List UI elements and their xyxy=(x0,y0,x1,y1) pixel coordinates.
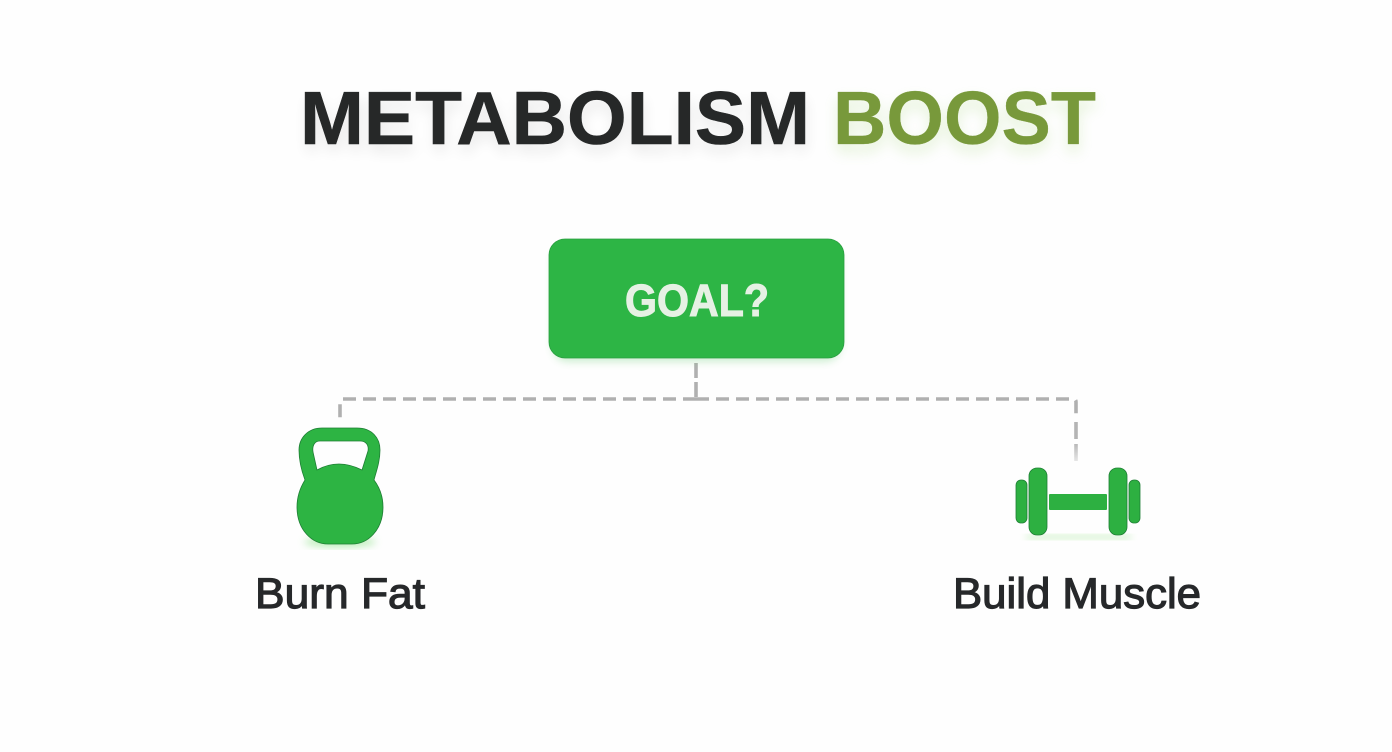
title: BOOST xyxy=(833,84,1096,168)
title: METABOLISM xyxy=(300,76,810,160)
title xyxy=(300,76,1096,168)
title: METABOLISM xyxy=(302,84,811,168)
connector lines xyxy=(340,363,1076,462)
label: burn fat: Burn Fat xyxy=(255,570,425,618)
goal label: GOAL? xyxy=(625,275,769,326)
icon: kettlebell xyxy=(297,428,383,547)
label: build muscle: Build Muscle xyxy=(953,570,1201,618)
decision box: goal xyxy=(549,239,844,362)
title: BOOST xyxy=(833,76,1096,160)
icon: dumbbell xyxy=(1016,468,1140,539)
